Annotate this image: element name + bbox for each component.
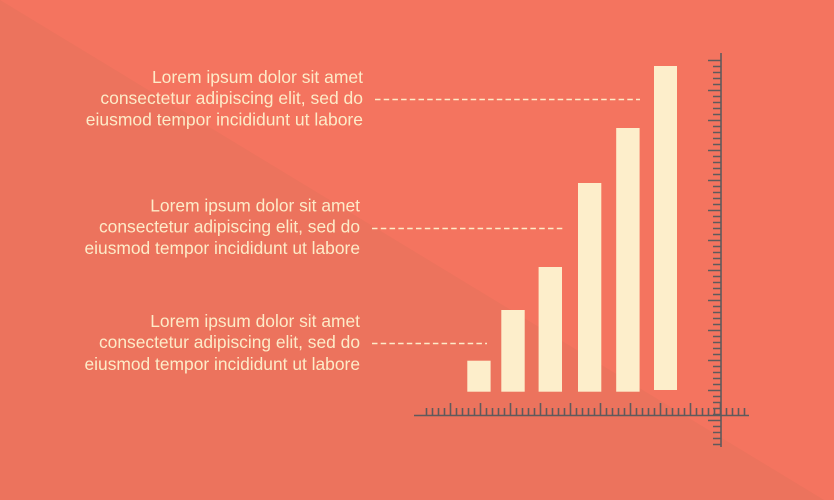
horizontal ruler axis (414, 403, 749, 416)
text block: middle annotation (84, 196, 360, 258)
vertical ruler axis (708, 53, 721, 447)
text block: bottom annotation (84, 311, 360, 374)
text block: top annotation: eiusmod tempor incididunt ut labore (86, 110, 363, 130)
text block: bottom annotation: eiusmod tempor incididunt ut labore (84, 354, 360, 374)
dashed leader line: bottom (372, 342, 487, 344)
text block: middle annotation: consectetur adipiscing elit, sed do (99, 216, 360, 236)
text block: middle annotation: Lorem ipsum dolor sit amet (150, 196, 360, 216)
text block: bottom annotation: Lorem ipsum dolor sit amet (150, 311, 360, 331)
text block: top annotation: Lorem ipsum dolor sit amet (152, 67, 363, 87)
dashed leader line: top (375, 98, 640, 100)
text block: top annotation (86, 67, 363, 130)
dashed leader line: middle (372, 228, 563, 230)
text block: bottom annotation: consectetur adipiscing elit, sed do (99, 332, 360, 352)
bar chart (467, 66, 677, 392)
text block: middle annotation: eiusmod tempor incididunt ut labore (84, 238, 360, 258)
text block: top annotation: consectetur adipiscing elit, sed do (100, 88, 363, 108)
